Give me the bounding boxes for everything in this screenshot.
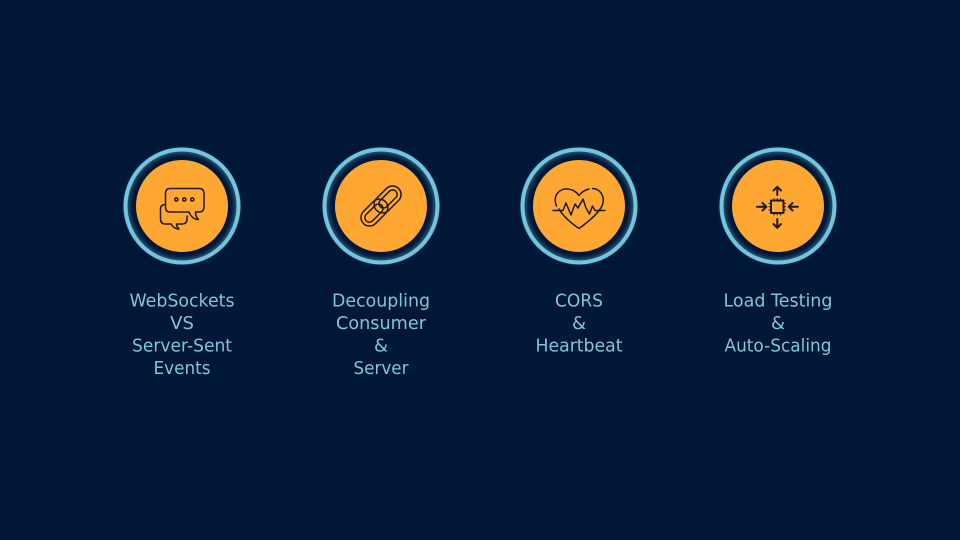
- panel: Decoupling Consumer & Server: [324, 150, 438, 379]
- icon: heart with pulse line: [553, 188, 605, 228]
- ring glow and ring: [522, 150, 636, 262]
- label: Decoupling Consumer & Server: Server: [354, 358, 409, 379]
- ring glow and ring: [722, 150, 834, 262]
- orange disc: [732, 160, 824, 252]
- panel: Load Testing & Auto-Scaling: [722, 150, 834, 356]
- label: WebSockets VS Server-Sent Events: VS: [170, 313, 194, 334]
- label: Load Testing & Auto-Scaling: Auto-Scaling: [724, 336, 832, 356]
- ring glow and ring: [324, 150, 438, 262]
- icon: chat bubbles: [160, 188, 204, 229]
- label: Decoupling Consumer & Server: &: [374, 336, 388, 356]
- orange disc: [533, 160, 625, 252]
- label: CORS & Heartbeat: CORS: [555, 290, 603, 312]
- label: WebSockets VS Server-Sent Events: Server-Sent: [132, 336, 232, 356]
- label: Load Testing & Auto-Scaling: Load Testing: [724, 290, 832, 312]
- label: Decoupling Consumer & Server: Decoupling: [332, 290, 430, 312]
- panel: WebSockets vs Server-Sent Events: [126, 150, 238, 379]
- label: CORS & Heartbeat: Heartbeat: [536, 336, 622, 356]
- orange disc: [136, 160, 228, 252]
- label: WebSockets VS Server-Sent Events: Events: [154, 358, 210, 379]
- label: Decoupling Consumer & Server: Consumer: [336, 313, 427, 334]
- label: WebSockets VS Server-Sent Events: WebSockets: [130, 290, 234, 312]
- label: CORS & Heartbeat: &: [572, 313, 586, 334]
- ring glow and ring: [126, 150, 238, 262]
- panel: CORS & Heartbeat: [522, 150, 636, 356]
- label: Load Testing & Auto-Scaling: &: [771, 313, 785, 334]
- orange disc: [335, 160, 427, 252]
- icon: chip with arrows: [757, 187, 798, 228]
- icon: chain link: [357, 182, 405, 230]
